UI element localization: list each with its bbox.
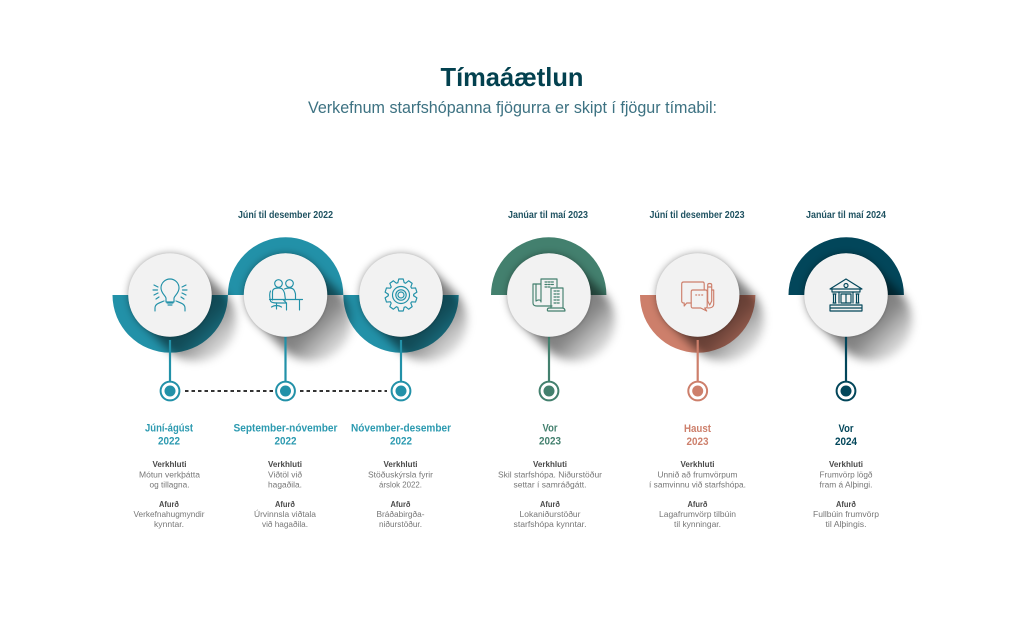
body text: Bráðabirgða- bbox=[376, 509, 425, 519]
column text: Haust 2023 bbox=[649, 423, 746, 529]
column text: Haust 2023: 2023 bbox=[686, 436, 708, 448]
circle: Júní-ágúst bbox=[128, 253, 212, 337]
node: Vor 2023 bbox=[540, 382, 558, 400]
body text: við hagaðila. bbox=[262, 519, 308, 529]
subtitle: Verkefnum starfshópanna fjögurra er skipt í fjögur tímabil: bbox=[308, 98, 717, 117]
body text: niðurstöður. bbox=[379, 519, 422, 529]
body text: kynntar. bbox=[154, 519, 184, 529]
column text: Vor 2024: 2024 bbox=[835, 436, 858, 448]
body text: árslok 2022. bbox=[379, 480, 422, 490]
circle: Vor 2023 bbox=[507, 253, 591, 337]
body text: Mótun verkþátta bbox=[139, 470, 200, 480]
stems bbox=[170, 330, 846, 382]
body text: fram á Alþingi. bbox=[820, 480, 872, 490]
dashed connector 2 bbox=[300, 390, 387, 392]
body text: Úrvinnsla viðtala bbox=[254, 509, 316, 519]
body text: Frumvörp lögð bbox=[820, 470, 873, 480]
icon: documents bbox=[533, 279, 565, 311]
body text: Verkhluti bbox=[268, 459, 302, 469]
body text bbox=[649, 459, 746, 529]
body text: hagaðila. bbox=[268, 480, 302, 490]
period label: Janúar til maí 2023: Janúar til maí 2023 bbox=[508, 210, 588, 221]
dashed connector 1 bbox=[185, 390, 275, 392]
body text: Fullbúin frumvörp bbox=[813, 509, 879, 519]
body text: og tillagna. bbox=[150, 480, 190, 490]
body text: Lokaniðurstöður bbox=[520, 509, 581, 519]
heading: Haust bbox=[684, 423, 711, 435]
body text: Afurð bbox=[688, 499, 708, 509]
long shadows bbox=[170, 295, 872, 321]
column text: Nóvember-desember 2022 bbox=[351, 422, 452, 529]
body text bbox=[134, 459, 205, 529]
body text bbox=[254, 459, 316, 529]
body text: starfshópa kynntar. bbox=[514, 519, 586, 529]
column text: Júní-ágúst 2022: 2022 bbox=[158, 436, 180, 448]
column text: Nóvember-desember 2022: 2022 bbox=[390, 436, 412, 448]
arc band 2022 bbox=[112, 237, 459, 353]
node: Vor 2024 bbox=[837, 382, 855, 400]
body text: Viðtöl við bbox=[268, 470, 302, 480]
icon: light bulb bbox=[153, 279, 187, 311]
column text: Vor 2024 bbox=[813, 423, 879, 529]
heading: Vor bbox=[542, 422, 558, 434]
icon: speech bubbles and pen bbox=[682, 282, 714, 311]
circle: Haust 2023 bbox=[656, 253, 739, 337]
icon: parliament building bbox=[830, 279, 862, 311]
period label: Janúar til maí 2024: Janúar til maí 2024 bbox=[806, 210, 886, 221]
node: Nóvember-desember bbox=[392, 382, 410, 400]
circle: September-nóvember bbox=[244, 253, 327, 337]
body text: Lagafrumvörp tilbúin bbox=[659, 509, 736, 519]
heading: September-nóvember bbox=[234, 422, 338, 434]
body text: í samvinnu við starfshópa. bbox=[649, 480, 746, 490]
column text: Vor 2023 bbox=[498, 422, 602, 529]
heading: Júní-ágúst bbox=[145, 422, 193, 434]
body text: til kynningar. bbox=[674, 519, 721, 529]
column text: Vor 2023: 2023 bbox=[539, 436, 561, 448]
arc: Vor 2024 bbox=[788, 237, 904, 295]
period label: Júní til desember 2022: Júní til desember 2022 bbox=[238, 210, 333, 221]
body text bbox=[368, 459, 433, 529]
node: September-nóvember bbox=[276, 382, 295, 400]
icon: people at desk bbox=[270, 280, 302, 310]
body text: Verkhluti bbox=[829, 459, 863, 469]
circle: Vor 2024 bbox=[804, 253, 888, 337]
icon: gear bbox=[384, 279, 418, 311]
body text: Afurð bbox=[275, 499, 295, 509]
arc: Haust 2023 bbox=[640, 295, 755, 353]
column text: Júní-ágúst 2022 bbox=[134, 422, 205, 529]
node: Haust 2023 bbox=[688, 382, 707, 400]
body text: Unnið að frumvörpum bbox=[658, 470, 738, 480]
body text bbox=[813, 459, 879, 529]
body text: Afurð bbox=[390, 499, 410, 509]
heading: Vor bbox=[838, 423, 854, 435]
node: Júní-ágúst bbox=[161, 382, 179, 400]
body text: Afurð bbox=[159, 499, 179, 509]
body text bbox=[498, 459, 602, 529]
body text: til Alþingis. bbox=[826, 519, 866, 529]
column text: September-nóvember 2022: 2022 bbox=[274, 436, 296, 448]
period label: Júní til desember 2023: Júní til desember 2023 bbox=[650, 210, 745, 221]
body text: Afurð bbox=[836, 499, 856, 509]
body text: settar í samráðgátt. bbox=[514, 480, 586, 490]
body text: Verkhluti bbox=[384, 459, 418, 469]
column text: September-nóvember 2022 bbox=[234, 422, 338, 529]
body text: Afurð bbox=[540, 499, 560, 509]
body text: Verkhluti bbox=[152, 459, 186, 469]
heading: Nóvember-desember bbox=[351, 422, 452, 434]
body text: Skil starfshópa. Niðurstöður bbox=[498, 470, 602, 480]
body text: Verkefnahugmyndir bbox=[134, 509, 205, 519]
body text: Stöðuskýrsla fyrir bbox=[368, 470, 433, 480]
circle: Nóvember-desember bbox=[359, 253, 443, 337]
body text: Verkhluti bbox=[680, 459, 714, 469]
arc: Vor 2023 bbox=[491, 237, 606, 295]
title: Tímaáætlun bbox=[440, 62, 584, 92]
body text: Verkhluti bbox=[533, 459, 567, 469]
